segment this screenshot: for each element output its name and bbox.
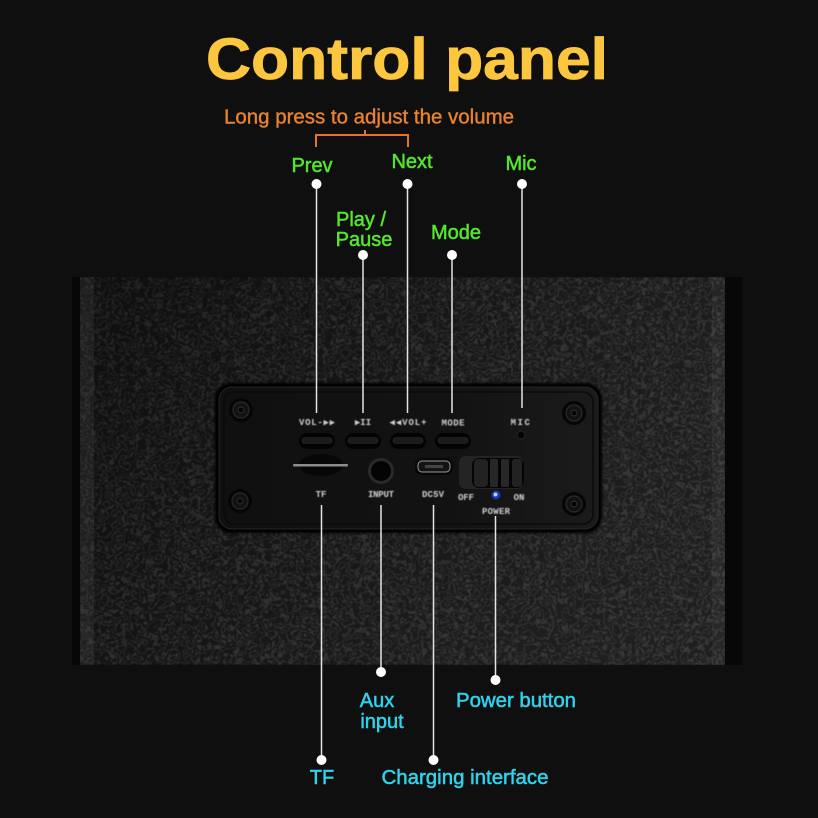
panel labels: DC5V (422, 490, 445, 500)
speaker body: leather (72, 277, 742, 665)
power switch (459, 456, 524, 489)
panel labels: MIC (511, 418, 531, 428)
volume note with bracket (224, 106, 514, 147)
panel labels (299, 418, 531, 517)
green labels: Mic (505, 153, 537, 175)
TF slot (293, 454, 348, 476)
panel labels: VOL-▶▶ (299, 418, 336, 428)
green labels: Mode (431, 222, 481, 244)
panel labels: ON (514, 493, 524, 503)
leader lines top (312, 179, 527, 413)
control plate (215, 383, 602, 533)
aux jack (368, 458, 394, 484)
micro usb (415, 458, 453, 475)
cyan labels: Power button (456, 690, 576, 712)
panel labels: POWER (482, 507, 511, 517)
title: Control panel (206, 27, 608, 92)
leader lines bottom (316, 505, 500, 765)
volume note with bracket: Long press to adjust the volume (224, 106, 514, 128)
green labels (291, 151, 537, 251)
cyan labels: TF (310, 767, 334, 789)
buttons (299, 433, 471, 449)
cyan labels: input (360, 711, 404, 733)
panel labels: OFF (458, 493, 474, 503)
power LED (492, 490, 500, 500)
panel labels: ◀◀VOL+ (390, 418, 426, 428)
panel labels: MODE (442, 418, 465, 428)
panel labels: INPUT (368, 490, 395, 500)
green labels: Prev (291, 155, 333, 177)
cyan labels (310, 690, 576, 789)
green labels: Next (391, 151, 433, 173)
green labels: Play / (336, 209, 386, 231)
cyan labels: Aux (360, 690, 394, 712)
panel labels: ▶II (355, 418, 371, 428)
cyan labels: Charging interface (382, 767, 548, 789)
mic hole (517, 431, 525, 439)
green labels: Pause (336, 229, 392, 251)
panel labels: TF (316, 490, 326, 500)
screws (228, 398, 586, 516)
